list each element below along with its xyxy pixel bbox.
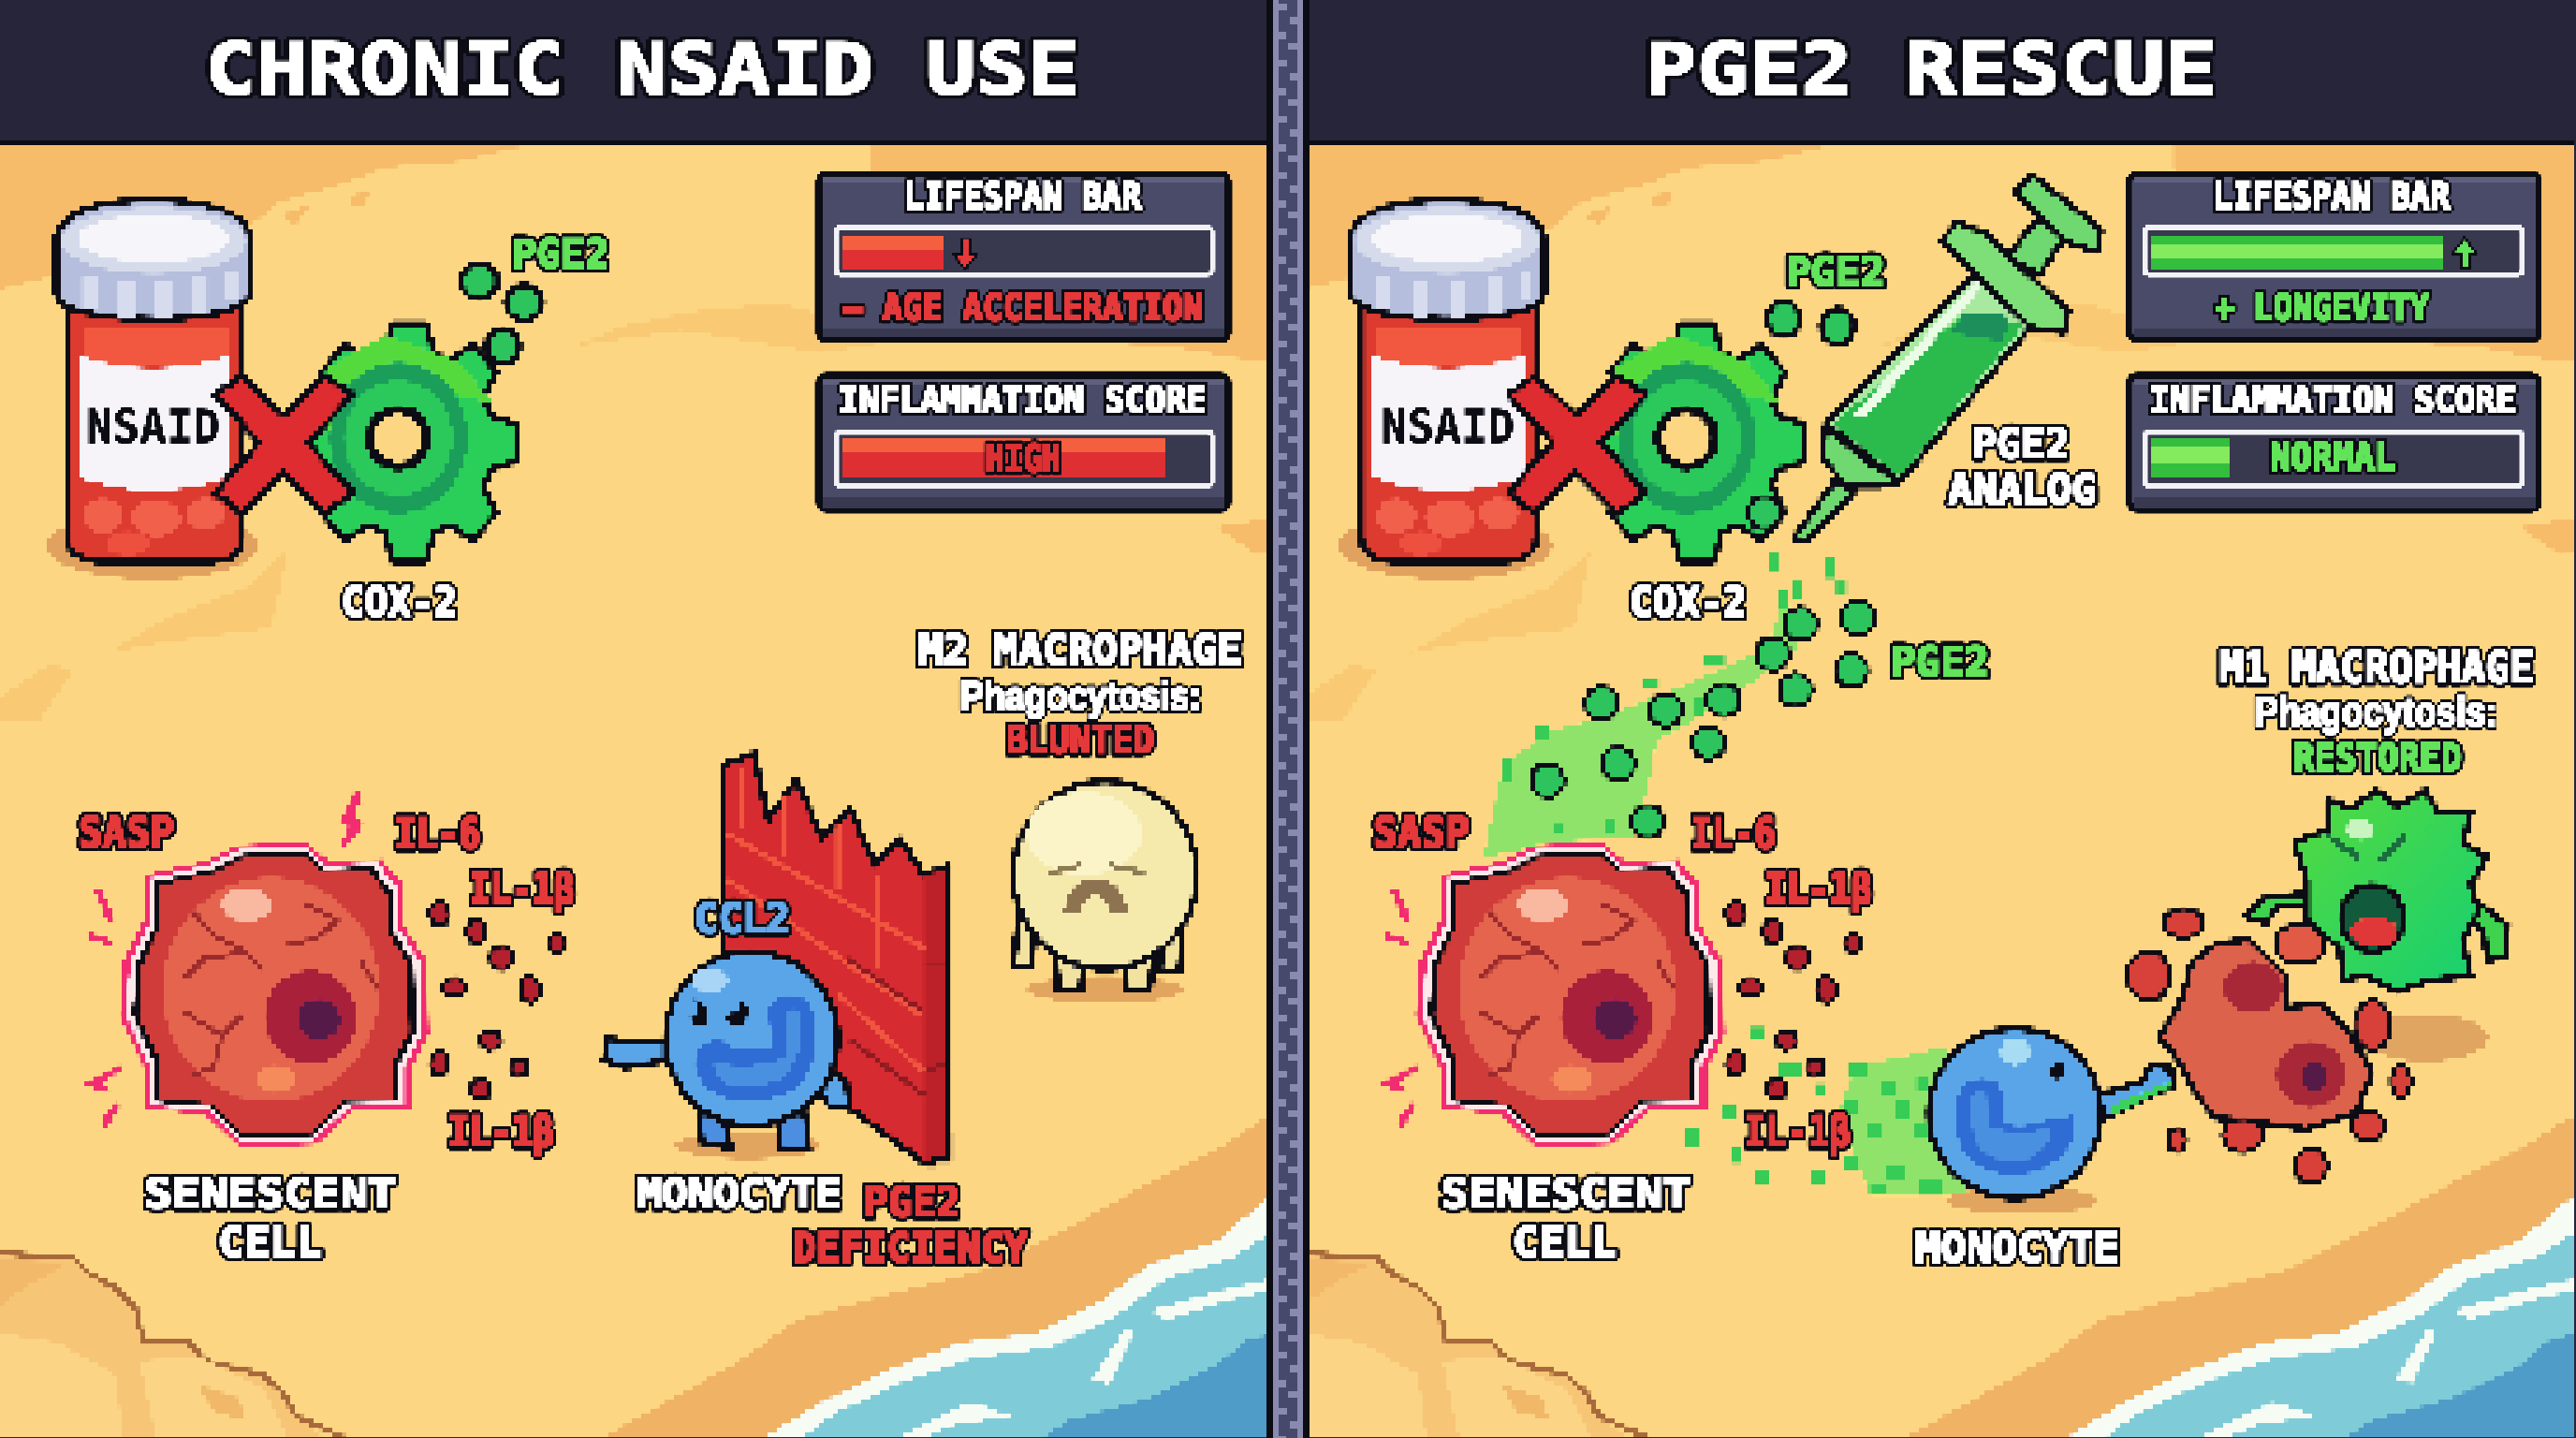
- lifespan heading: LIFESPAN BAR: [2213, 176, 2450, 218]
- inflammation gauge frame: [2144, 432, 2523, 486]
- label: phagocytosis: Phagocytosis:: [960, 673, 1201, 719]
- label: phagocytosis: Phagocytosis:: [2255, 689, 2497, 735]
- bottle label: NSAID: [1381, 400, 1515, 454]
- panel: lifespan bar: [819, 174, 1228, 340]
- icon: NSAID pill bottle: [1339, 199, 1553, 580]
- arrow up: [2452, 238, 2477, 269]
- lifespan gauge frame: [836, 227, 1212, 274]
- title: PGE2 RESCUE: [1645, 27, 2217, 110]
- inflammation heading: INFLAMMATION SCORE: [839, 380, 1207, 420]
- label: PGE2 analog: ANALOG: [1948, 466, 2097, 514]
- inflammation gauge frame: [836, 432, 1212, 486]
- illustrations: right panel artwork: [1303, 0, 2576, 1438]
- label: monocyte: MONOCYTE: [1915, 1225, 2119, 1272]
- label: M1 macrophage: M1 MACROPHAGE: [2219, 642, 2534, 693]
- title: CHRONIC NSAID USE: [205, 27, 1079, 110]
- PGE2 droplets in stream: [1531, 496, 1874, 838]
- lifespan gauge fill: [842, 236, 943, 269]
- panel: PGE2 rescue: [1303, 0, 2576, 1438]
- lifespan heading: LIFESPAN BAR: [904, 176, 1141, 218]
- label: IL-1 beta upper: IL-1β: [469, 864, 575, 914]
- illustrations: left panel artwork: [0, 0, 1329, 1438]
- PGE2 droplets: [461, 264, 542, 363]
- label: monocyte: MONOCYTE: [637, 1170, 842, 1218]
- lifespan gauge frame: [2144, 227, 2523, 274]
- label: IL-1 beta lower: IL-1β: [1744, 1107, 1851, 1156]
- cell: senescent cell: [119, 843, 429, 1146]
- label: IL-6: IL-6: [1690, 809, 1776, 858]
- dying senescent cell debris: [2128, 908, 2488, 1183]
- age acceleration text: – AGE ACCELERATION: [842, 287, 1203, 330]
- icon: NSAID pill bottle: [45, 199, 258, 580]
- label: M2 macrophage: M2 MACROPHAGE: [918, 625, 1242, 675]
- PGE2 spray stream: [1484, 550, 1847, 858]
- arrow down: [953, 239, 977, 270]
- HIGH text: HIGH: [986, 436, 1061, 481]
- panel: inflammation score: [819, 375, 1228, 509]
- label: CCL2: CCL2: [695, 895, 790, 943]
- inflammation gauge fill: [2150, 438, 2231, 477]
- icon: red X blocking COX-2: [1508, 376, 1647, 514]
- inflammation gauge fill: [842, 438, 1164, 477]
- label: COX-2: COX-2: [1630, 579, 1747, 626]
- PGE2 droplets at syringe: [1767, 301, 1854, 344]
- label: PGE2 analog: PGE2: [1972, 420, 2070, 468]
- cell: monocyte blocked by wall: [604, 951, 850, 1159]
- cell: senescent cell: [1415, 843, 1725, 1146]
- label: IL-1 beta lower: IL-1β: [448, 1107, 554, 1156]
- icon: red X blocking COX-2: [215, 376, 353, 514]
- bottle label: NSAID: [86, 400, 220, 454]
- label: IL-6: IL-6: [395, 809, 480, 858]
- header bar: [0, 0, 1273, 146]
- label: COX-2: COX-2: [342, 579, 457, 626]
- labels: SASP: SASP: [79, 808, 174, 858]
- label: restored: RESTORED: [2293, 737, 2462, 780]
- beach background: [0, 140, 1329, 1438]
- label: IL-1 beta upper: IL-1β: [1765, 864, 1872, 914]
- icon: COX-2 gear: [302, 324, 516, 561]
- label: PGE2 stream: PGE2: [1891, 638, 1989, 686]
- panel: lifespan bar: [2130, 174, 2539, 340]
- beach background: [1303, 140, 2576, 1438]
- icon: PGE2 analog syringe: [1793, 174, 2101, 540]
- NORMAL text: NORMAL: [2270, 436, 2395, 479]
- senescence sparks: [82, 790, 366, 1127]
- IL-1 beta particles: [1726, 902, 1862, 1100]
- header bar: [1307, 0, 2576, 146]
- cell: sad M2 macrophage: [1013, 781, 1197, 1004]
- label: senescent cell: SENESCENT: [144, 1170, 396, 1218]
- senescence sparks: [1379, 891, 1419, 1127]
- inflammation heading: INFLAMMATION SCORE: [2149, 380, 2516, 420]
- label: senescent cell: SENESCENT: [1441, 1170, 1690, 1218]
- label: PGE2 deficiency: DEFICIENCY: [793, 1225, 1028, 1272]
- label: blunted: BLUNTED: [1006, 719, 1154, 762]
- cell: angry M1 macrophage: [2245, 790, 2508, 991]
- green spray near monocyte: [1687, 1027, 1974, 1196]
- label: cell: CELL: [1513, 1219, 1617, 1267]
- center divider: [1266, 0, 1310, 1438]
- label: SASP: SASP: [1373, 808, 1470, 858]
- label: PGE2 analog: [1948, 420, 2097, 514]
- text and HUD layer: left panel: [79, 27, 1242, 1272]
- cell: attacking monocyte: [1929, 1029, 2174, 1214]
- longevity text: + LONGEVITY: [2215, 287, 2429, 330]
- label: PGE2: PGE2: [1786, 249, 1885, 296]
- label: PGE2: PGE2: [512, 231, 609, 278]
- IL-1 beta particles: [430, 902, 566, 1100]
- lifespan gauge fill: [2150, 236, 2442, 269]
- label: cell: CELL: [218, 1219, 322, 1267]
- text and HUD layer: right panel: [1373, 27, 2539, 1272]
- panel: chronic NSAID use: [0, 0, 1329, 1438]
- label: PGE2 deficiency: [793, 1179, 1028, 1272]
- icon: COX-2 gear: [1590, 324, 1804, 561]
- panel: inflammation score: [2130, 375, 2539, 509]
- brick wall: [723, 754, 957, 1170]
- label: PGE2 deficiency: PGE2: [864, 1179, 960, 1226]
